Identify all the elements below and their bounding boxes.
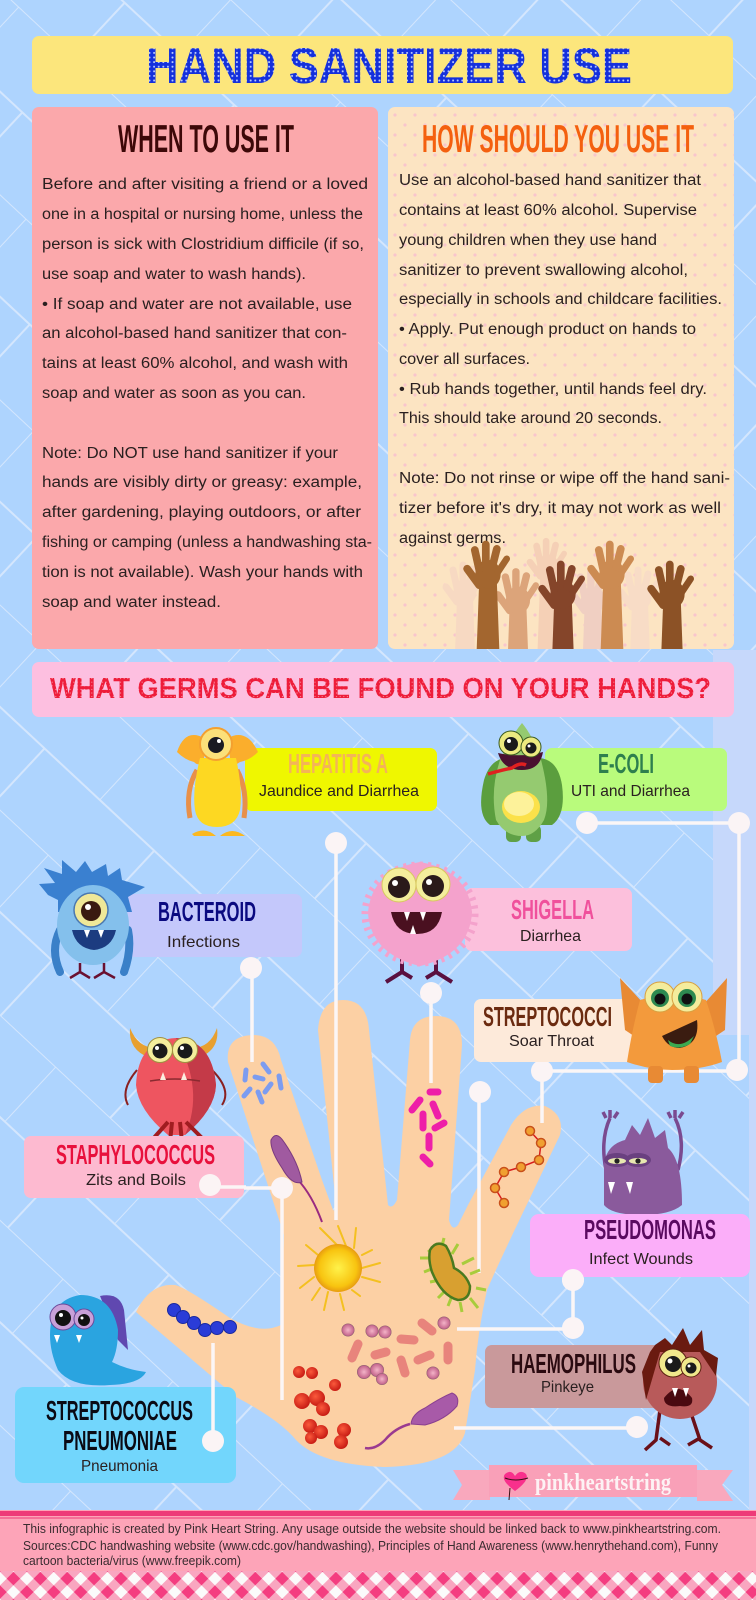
logo ribbon (453, 1465, 733, 1501)
text block: when to use it: • If soap and water are not available, use (42, 296, 352, 313)
text block: when to use it: an alcohol-based hand sanitizer that con- (42, 325, 347, 342)
title banner (32, 36, 733, 94)
text block: how should you use it: young children when they use hand (399, 232, 657, 249)
label: e-coli: E-COLI (598, 748, 654, 779)
logo ribbon: pinkheartstring (535, 1470, 671, 1496)
gingham strip (0, 1571, 756, 1600)
label: haemophilus: HAEMOPHILUS (511, 1348, 636, 1379)
label: shigella (465, 888, 632, 951)
label: streptococcus pneumoniae (15, 1343, 236, 1483)
text block: how should you use it: • Apply. Put enough product on hands to (399, 321, 696, 338)
label: hepatitis a: HEPATITIS A (288, 748, 388, 779)
connector: e-coli (531, 812, 750, 1123)
label: haemophilus: Pinkeye (541, 1379, 594, 1396)
label: streptococcus pneumoniae: PNEUMONIAE (63, 1425, 177, 1456)
monster: haemophilus (642, 1328, 718, 1450)
text block: how should you use it: Note: Do not rinse or wipe off the hand sani- (399, 470, 730, 487)
label: pseudomonas (530, 1214, 750, 1291)
text block: when to use it: hands are visibly dirty or greasy: example, (42, 474, 362, 491)
text block: when to use it (42, 176, 372, 611)
label: streptococci (474, 999, 644, 1062)
text block: how should you use it: Use an alcohol-based hand sanitizer that (399, 172, 702, 189)
label: e-coli: UTI and Diarrhea (571, 783, 690, 800)
text block: when to use it: fishing or camping (unless a handwashing sta- (42, 534, 372, 551)
label: e-coli (545, 748, 727, 811)
connector end: staphylococcus (199, 1174, 246, 1196)
connector: pneumoniae (202, 1343, 224, 1452)
germ: pink rods (352, 1323, 448, 1373)
monster: shigella (366, 866, 474, 982)
text block: when to use it: tains at least 60% alcohol, and wash with (42, 355, 348, 372)
monster: streptococcus pneumoniae (50, 1295, 146, 1385)
label: streptococci: STREPTOCOCCI (483, 1001, 612, 1032)
text block: how should you use it: This should take around 20 seconds. (399, 410, 662, 427)
monster: streptococci (620, 978, 727, 1083)
label: bacteroid: Infections (167, 934, 240, 951)
text block: when to use it: use soap and water to wash hands). (42, 266, 306, 283)
label: streptococci: Soar Throat (509, 1033, 595, 1050)
text block: when to use it: Before and after visiting a friend or a loved (42, 176, 368, 193)
germ: magenta rods on ring finger (412, 1092, 444, 1164)
credits text: Sources:CDC handwashing website (www.cdc.gov/handwashing), Principles of Hand Awareness (www.henrythehand.com), Funny (23, 1539, 719, 1553)
text block: when to use it: person is sick with Clostridium difficile (if so, (42, 236, 364, 253)
germ: yellow sun virus (298, 1226, 380, 1310)
text block: when to use it: after gardening, playing outdoors, or after (42, 504, 361, 521)
monster: bacteroid (39, 860, 145, 978)
label: bacteroid (125, 894, 302, 957)
text block: how should you use it: especially in schools and childcare facilities. (399, 291, 722, 308)
icon: raised hands (442, 538, 694, 649)
monster: staphylococcus (125, 1028, 225, 1142)
monster: hepatitis a (177, 728, 258, 836)
text block: when to use it: one in a hospital or nursing home, unless the (42, 206, 363, 223)
monster: pseudomonas (603, 1110, 683, 1215)
panel: when to use it (32, 107, 378, 649)
germs heading: WHAT GERMS CAN BE FOUND ON YOUR HANDS? (50, 673, 711, 705)
text block: how should you use it: tizer before it's dry, it may not work as well (399, 500, 721, 517)
label: shigella: SHIGELLA (511, 894, 594, 925)
text block: how should you use it: against germs. (399, 530, 506, 547)
germs on hand (168, 1064, 546, 1449)
germ: orange chain on index finger (490, 1126, 546, 1208)
label: bacteroid: BACTEROID (158, 896, 256, 927)
label: staphylococcus: Zits and Boils (86, 1172, 186, 1189)
germ: purple bacterium on palm (365, 1393, 458, 1448)
text block: how should you use it: sanitizer to prevent swallowing alcohol, (399, 262, 688, 279)
label: shigella: Diarrhea (520, 928, 581, 945)
connector: pseudomonas (457, 1269, 584, 1339)
connector: streptococci to palm (469, 1081, 491, 1273)
text block: when to use it: soap and water instead. (42, 594, 221, 611)
credits text: cartoon bacteria/virus (www.freepik.com) (23, 1554, 241, 1568)
connector: staphylococcus (244, 1177, 293, 1400)
text block: when to use it: soap and water as soon as you can. (42, 385, 306, 402)
illustration: hand (136, 1000, 561, 1467)
label: staphylococcus (24, 1136, 246, 1198)
footer (0, 1510, 756, 1600)
label: hepatitis a (245, 748, 437, 811)
germ: blue rods on pinky (244, 1064, 281, 1102)
germ: blue chain on thumb (168, 1304, 236, 1336)
connector: hepatitis a (325, 832, 347, 1220)
connector: shigella (420, 982, 442, 1083)
label: haemophilus (485, 1345, 660, 1408)
label: staphylococcus: STAPHYLOCOCCUS (56, 1139, 215, 1170)
germ: red cocci (293, 1366, 351, 1449)
text block: when to use it: Note: Do NOT use hand sanitizer if your (42, 445, 338, 462)
credits text: This infographic is created by Pink Heart String. Any usage outside the website should be linked back to www.pinkheartstring.com. (23, 1522, 721, 1536)
monster: e-coli (481, 723, 563, 842)
text block: how should you use it: contains at least 60% alcohol. Supervise (399, 202, 697, 219)
credits text (23, 1522, 721, 1568)
title: HAND SANITIZER USE (146, 38, 632, 94)
germs heading banner (32, 662, 734, 717)
label: streptococcus pneumoniae: Pneumonia (81, 1458, 158, 1475)
germ: green bacterium (420, 1238, 486, 1312)
heading: when to use it: WHEN TO USE IT (118, 118, 294, 161)
label: streptococcus pneumoniae: STREPTOCOCCUS (46, 1395, 193, 1426)
connector: bacteroid (240, 957, 262, 1062)
label: hepatitis a: Jaundice and Diarrhea (259, 783, 419, 800)
connector dot: pseudomonas (562, 1269, 584, 1291)
text block: when to use it: tion is not available). Wash your hands with (42, 564, 363, 581)
text block: how should you use it: cover all surfaces. (399, 351, 530, 368)
connector: haemophilus (454, 1416, 648, 1438)
germ: pink cocci (342, 1316, 450, 1385)
germ: purple spiral on pinky (271, 1135, 322, 1222)
text block: how should you use it (399, 172, 730, 547)
label: pseudomonas: Infect Wounds (589, 1251, 693, 1268)
panel: how should you use it (388, 107, 734, 692)
text block: how should you use it: • Rub hands together, until hands feel dry. (399, 381, 707, 398)
